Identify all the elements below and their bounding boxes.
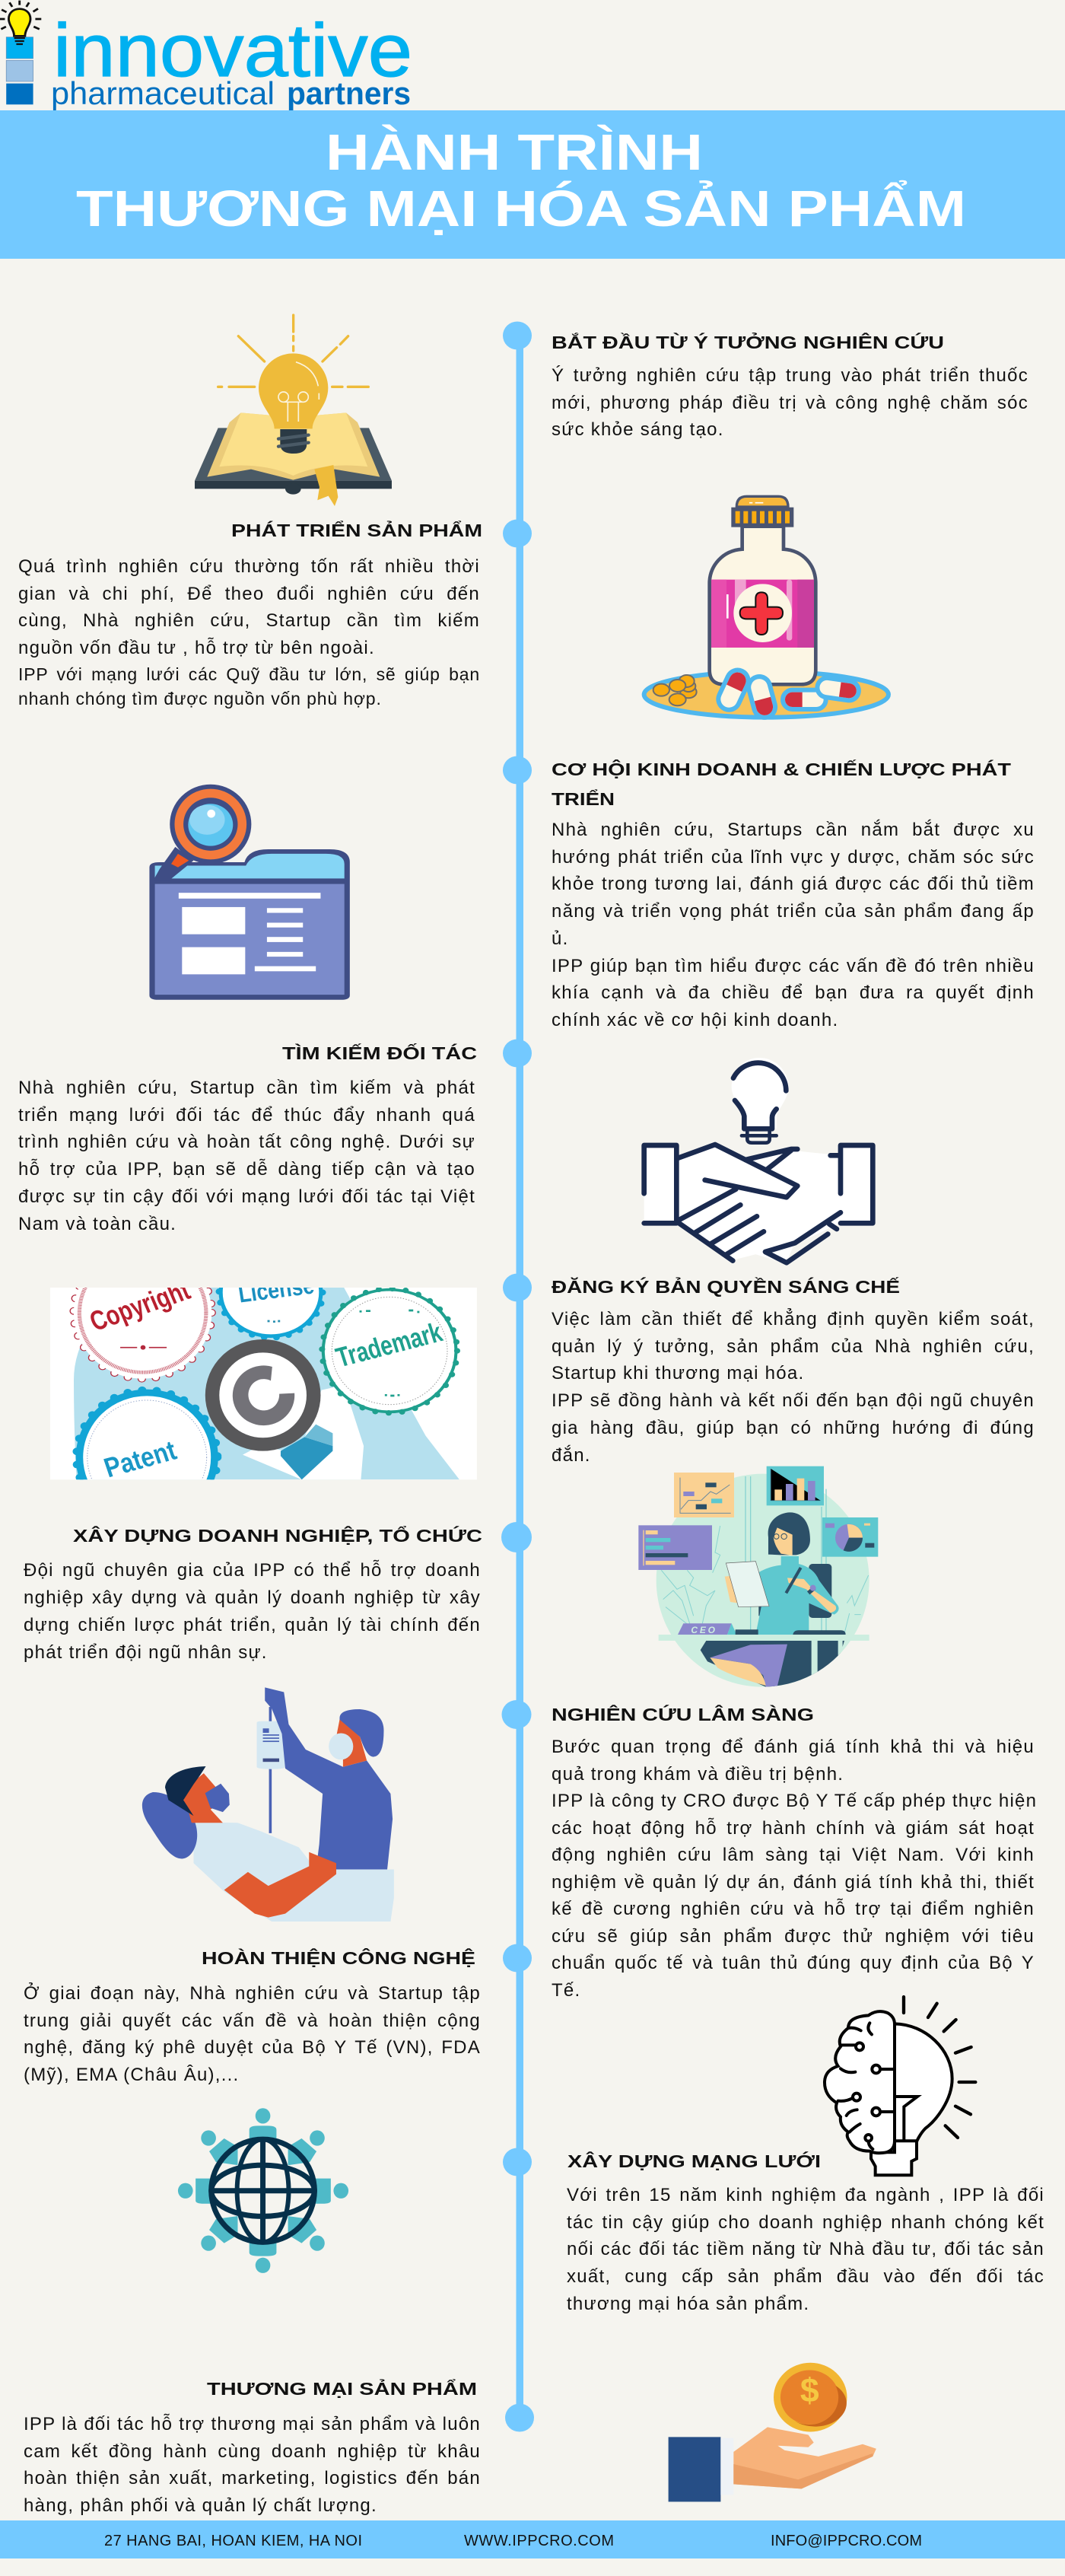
footer contacts: 27 HANG BAI, HOAN KIEM, HA NOI bbox=[104, 2533, 362, 2549]
body text: phát triển đội ngũ nhân sự. bbox=[24, 1642, 268, 1663]
body text bbox=[552, 365, 1028, 440]
icon: brain and light bulb bbox=[825, 1997, 975, 2175]
heading: HOÀN THIỆN CÔNG NGHỆ bbox=[202, 1947, 475, 1968]
body text bbox=[552, 1737, 1037, 2000]
body text bbox=[24, 1560, 481, 1663]
body text: hướng phát triển của lĩnh vực y dược, chăm sóc sức bbox=[552, 847, 1035, 868]
footer contacts: INFO@IPPCRO.COM bbox=[771, 2533, 922, 2549]
body text: IPP giúp bạn tìm hiểu được các vấn đề đó trên nhiều bbox=[552, 956, 1035, 976]
body text: nhanh chóng tìm được nguồn vốn phù hợp. bbox=[18, 689, 382, 708]
seal: trademark bbox=[322, 1288, 457, 1413]
body text: kế đề cương nghiên cứu và hỗ trợ tại điểm nghiên bbox=[552, 1899, 1035, 1919]
seal: patent bbox=[73, 1387, 222, 1479]
body text bbox=[24, 1982, 481, 2085]
seal: copyright bbox=[70, 1288, 216, 1383]
panel: step 10 commercialization bbox=[24, 2377, 481, 2516]
body text: Nam và toàn cầu. bbox=[18, 1214, 176, 1234]
body text: cam kết đồng hành cùng doanh nghiệp từ khâu bbox=[24, 2441, 481, 2462]
body text: chính xác về cơ hội kinh doanh. bbox=[552, 1010, 838, 1030]
body text: IPP với mạng lưới các Quỹ đầu tư lớn, sẽ giúp bạn bbox=[18, 664, 480, 684]
panel: step 1 research idea bbox=[552, 331, 1028, 440]
body text: tác tin cậy giúp cho doanh nghiệp nhanh chóng kết bbox=[567, 2212, 1044, 2233]
body text bbox=[24, 2414, 481, 2516]
body text: gia hàng đầu, giúp bạn có những hướng đi đúng bbox=[552, 1418, 1035, 1438]
body text: ủ. bbox=[552, 928, 569, 949]
logo wordmark: innovative bbox=[53, 8, 412, 92]
body text: nguồn vốn đầu tư , hỗ trợ từ bên ngoài. bbox=[18, 638, 375, 658]
body text: hàng, phân phối và quản lý chất lượng. bbox=[24, 2495, 377, 2516]
heading: XÂY DỰNG DOANH NGHIỆP, TỔ CHỨC bbox=[73, 1525, 482, 1546]
icon: copyright symbol bbox=[205, 1339, 320, 1451]
body text: IPP là công ty CRO được Bộ Y Tế cấp phép thực hiện bbox=[552, 1791, 1037, 1811]
body text: Bước quan trọng để đánh giá tính khả thi và hiệu bbox=[552, 1737, 1035, 1757]
icon: logo squares and bulb bbox=[0, 1, 41, 104]
body text: dựng chiến lược phát triển, quản lý tài chính đến bbox=[24, 1615, 481, 1635]
body text: mới, phương pháp điều trị và công nghệ chăm sóc bbox=[552, 393, 1028, 413]
panel: step 8 technology completion bbox=[24, 1947, 481, 2085]
seal: copyright: Copyright bbox=[85, 1275, 195, 1337]
body text: đắn. bbox=[552, 1445, 591, 1466]
body text: Việc làm cần thiết để khẳng định quyền kiểm soát, bbox=[552, 1309, 1035, 1329]
seal: patent: Patent bbox=[100, 1435, 180, 1484]
body text: thương mại hóa sản phẩm. bbox=[567, 2294, 809, 2314]
logo bbox=[0, 1, 412, 111]
body text: Tế. bbox=[552, 1980, 580, 2000]
body text: triển mạng lưới đối tác để thúc đẩy nhanh quá bbox=[18, 1105, 475, 1126]
body text: IPP là đối tác hỗ trợ thương mại sản phẩm và luôn bbox=[24, 2414, 481, 2434]
heading: PHÁT TRIỂN SẢN PHẨM bbox=[231, 519, 482, 540]
body text: hỗ trợ của IPP, bạn sẽ dễ dàng tiếp cận và tạo bbox=[18, 1159, 475, 1180]
body text: các hoạt động hỗ trợ hành chính và giám sát hoạt bbox=[552, 1817, 1035, 1839]
icon: open book with light bulb bbox=[195, 315, 392, 506]
heading: THƯƠNG MẠI SẢN PHẨM bbox=[207, 2377, 477, 2399]
heading: TRIỂN bbox=[552, 788, 615, 809]
illustration: businesswoman CEO with charts bbox=[638, 1466, 878, 1687]
body text: Nhà nghiên cứu, Startups cần nắm bắt được xu bbox=[552, 820, 1035, 840]
heading bbox=[552, 759, 1011, 809]
icon: hand holding dollar coin: $ bbox=[800, 2372, 819, 2409]
body text: trung giải quyết các vấn đề và hoàn thiện cộng bbox=[24, 2011, 481, 2031]
panel: step 7 clinical research bbox=[552, 1704, 1037, 2000]
heading: BẮT ĐẦU TỪ Ý TƯỞNG NGHIÊN CỨU bbox=[552, 331, 944, 352]
body text: cùng, Nhà nghiên cứu, Startup cần tìm kiếm bbox=[18, 610, 480, 631]
footer band bbox=[0, 2520, 1065, 2558]
panel: step 4 partners bbox=[18, 1043, 477, 1234]
seal: trademark: Trademark bbox=[332, 1317, 447, 1374]
body text: sức khỏe sáng tạo. bbox=[552, 419, 724, 440]
body text: Với trên 15 năm kinh nghiệm đa ngành , IPP là đối bbox=[567, 2185, 1044, 2205]
body text: nghiệm về quản lý dự án, đánh giá tính khả thi, thiết bbox=[552, 1872, 1035, 1892]
logo wordmark: partners bbox=[287, 75, 411, 111]
body text: gian và chi phí, Để theo đuổi nghiên cứu đến bbox=[18, 584, 480, 604]
body text: Ở giai đoạn này, Nhà nghiên cứu và Startup tập bbox=[24, 1983, 481, 2004]
body text: cứu sẽ giúp sản phẩm được thử nghiệm với tiêu bbox=[552, 1925, 1035, 1947]
body text: năng và triển vọng phát triển của sản phẩm đang ấp bbox=[552, 901, 1035, 922]
heading: XÂY DỰNG MẠNG LƯỚI bbox=[567, 2151, 821, 2171]
body text: quả trong khám và điều trị bệnh. bbox=[552, 1764, 844, 1784]
body text bbox=[552, 819, 1035, 1030]
panel: step 5 patent registration bbox=[552, 1275, 1035, 1466]
body text bbox=[18, 1078, 475, 1234]
body text: khỏe trong tương lai, đánh giá được các đối thủ tiềm bbox=[552, 874, 1035, 894]
image: copyright, license, trademark and patent seals bbox=[50, 1288, 477, 1479]
body text: trình nghiên cứu và hoàn tất công nghệ. Dưới sự bbox=[18, 1132, 475, 1152]
footer contacts bbox=[104, 2533, 922, 2549]
illustration: nurse with patient bbox=[142, 1687, 394, 1922]
body text: động nghiên cứu lâm sàng tại Việt Nam. Với kinh bbox=[552, 1845, 1035, 1865]
body text bbox=[567, 2185, 1044, 2314]
heading: CƠ HỘI KINH DOANH & CHIẾN LƯỢC PHÁT bbox=[552, 759, 1011, 779]
illustration: businesswoman CEO with charts: CEO bbox=[691, 1625, 716, 1635]
footer contacts: WWW.IPPCRO.COM bbox=[464, 2533, 614, 2549]
panel: step 2 product development bbox=[18, 519, 482, 708]
body text: hoàn thiện sản xuất, marketing, logistics đến bán bbox=[24, 2468, 481, 2488]
body text: Ý tưởng nghiên cứu tập trung vào phát triển thuốc bbox=[552, 365, 1028, 386]
title: HÀNH TRÌNH bbox=[326, 124, 703, 181]
title bbox=[76, 124, 966, 237]
icon: folder with magnifying glass bbox=[149, 785, 350, 1000]
panel: step 6 building the company bbox=[24, 1525, 482, 1663]
seal: license: License bbox=[237, 1272, 316, 1308]
heading: NGHIÊN CỨU LÂM SÀNG bbox=[552, 1704, 814, 1724]
title band bbox=[0, 110, 1065, 259]
body text: xuất, cung cấp sản phẩm đầu vào đến đối tác bbox=[567, 2266, 1044, 2287]
body text: Quá trình nghiên cứu thường tốn rất nhiều thời bbox=[18, 556, 480, 577]
seal: license bbox=[216, 1288, 326, 1341]
heading: TÌM KIẾM ĐỐI TÁC bbox=[282, 1043, 477, 1063]
title: THƯƠNG MẠI HÓA SẢN PHẨM bbox=[76, 180, 966, 237]
body text: Nhà nghiên cứu, Startup cần tìm kiếm và phát bbox=[18, 1078, 475, 1098]
logo wordmark: pharmaceutical bbox=[51, 75, 275, 111]
icon: handshake with light bulb bbox=[644, 1058, 873, 1263]
timeline bbox=[501, 321, 534, 2432]
body text: nghệ, đăng ký phê duyệt của Bộ Y Tế (VN), FDA bbox=[24, 2037, 481, 2058]
icon: hand holding dollar coin bbox=[669, 2363, 876, 2501]
body text: IPP sẽ đồng hành và kết nối đến bạn đội ngũ chuyên bbox=[552, 1390, 1035, 1411]
body text bbox=[552, 1308, 1035, 1466]
body text: Đội ngũ chuyên gia của IPP có thể hỗ trợ doanh bbox=[24, 1560, 481, 1581]
body text: chuẩn quốc tế và tuân thủ đúng quy định của Bộ Y bbox=[552, 1953, 1035, 1973]
body text: quản lý ý tưởng, sản phẩm của Nhà nghiên cứu, bbox=[552, 1336, 1035, 1357]
heading: ĐĂNG KÝ BẢN QUYỀN SÁNG CHẾ bbox=[552, 1275, 900, 1297]
icon: medicine bottle with pills bbox=[644, 496, 889, 720]
body text: nghiệp xây dựng và quản lý doanh nghiệp từ xây bbox=[24, 1587, 481, 1608]
body text: được sự tin cậy đối với mạng lưới đối tác tại Việt bbox=[18, 1186, 475, 1207]
panel: step 9 building a network bbox=[567, 2151, 1044, 2314]
icon: globe with people network bbox=[178, 2108, 348, 2273]
body text: nối các đối tác tiềm năng từ Nhà đầu tư, đối tác sản bbox=[567, 2239, 1044, 2259]
body text: khía cạnh và đa chiều để bạn đưa ra quyết định bbox=[552, 982, 1035, 1003]
panel: step 3 business opportunity bbox=[552, 759, 1035, 1030]
body text: Startup khi thương mại hóa. bbox=[552, 1363, 804, 1384]
body text bbox=[18, 556, 480, 708]
body text: (Mỹ), EMA (Châu Âu),... bbox=[24, 2065, 239, 2085]
